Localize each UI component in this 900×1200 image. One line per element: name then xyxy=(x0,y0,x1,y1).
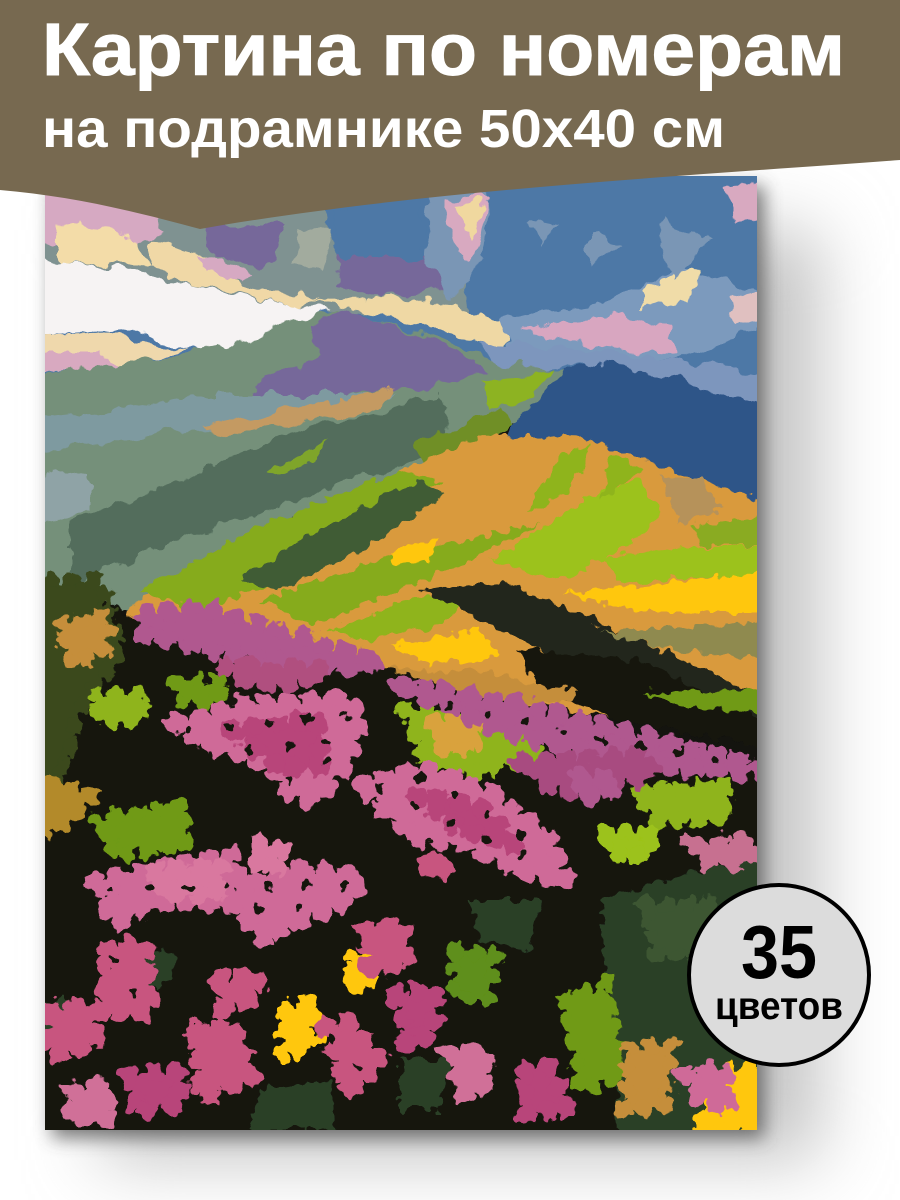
badge: 35 colours: 35 xyxy=(741,910,817,994)
dark gaps in flower clusters xyxy=(110,700,750,1075)
badge: 35 colours: цветов xyxy=(715,985,843,1028)
sky and clouds xyxy=(45,176,757,402)
top banner xyxy=(0,0,900,229)
painting: mountain landscape xyxy=(30,160,770,1140)
subtitle: на подрамнике 50х40 см xyxy=(42,99,725,159)
title: Картина по номерам xyxy=(42,8,845,91)
badge: 35 colours xyxy=(689,885,869,1065)
orange ridge and green slopes xyxy=(126,432,757,718)
foreground dark meadow xyxy=(30,580,770,1140)
canvas shadow xyxy=(52,186,820,1160)
pink rhododendron flowers xyxy=(46,607,757,1120)
distant mountains xyxy=(30,310,770,610)
